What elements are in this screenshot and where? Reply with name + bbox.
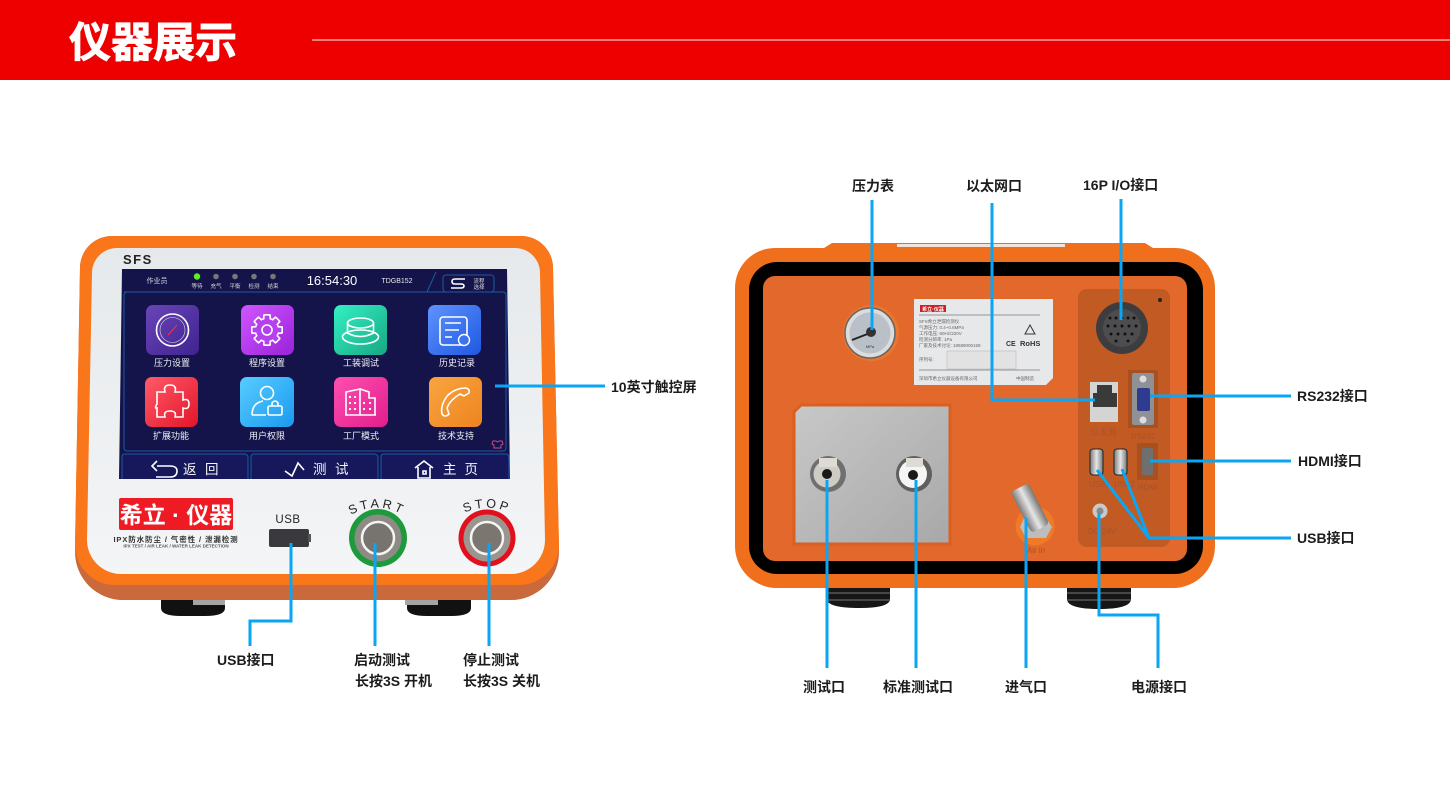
icon: user permissions: 用户权限 <box>249 430 285 441</box>
orange casing <box>75 236 559 600</box>
DC power jack: DC 24V <box>1088 527 1117 536</box>
spec label: 气源压力: 0.4~0.6MPa <box>919 324 964 331</box>
callout: test port: 测试口 <box>803 679 845 695</box>
icon: technical support <box>429 377 482 441</box>
spec label: 序列号: <box>919 356 934 363</box>
start button: START <box>348 499 404 514</box>
callout: power port: 电源接口 <box>1131 679 1187 695</box>
button: back: 返回 <box>183 462 227 477</box>
spec label: 工作电压: 60Hz/220V <box>919 330 962 337</box>
test port <box>810 456 846 492</box>
callout: stop test: 长按3S 关机 <box>463 673 540 689</box>
16P connector <box>1096 298 1162 354</box>
icon: program settings: 程序设置 <box>249 357 285 368</box>
button: home <box>381 454 509 479</box>
RS232 port: RS232 <box>1131 432 1156 441</box>
status bar: 等待 <box>191 282 203 290</box>
callout: 16P IO port: 16P I/O接口 <box>1083 177 1158 193</box>
header banner <box>0 0 1450 80</box>
orange casing <box>735 243 1215 588</box>
stop button <box>458 499 516 566</box>
status bar: 充气 <box>210 282 222 290</box>
status bar: 选择 <box>473 283 485 291</box>
icon: factory mode <box>334 377 388 441</box>
start button <box>348 499 407 567</box>
pressure gauge <box>843 305 899 361</box>
USB port <box>269 514 311 547</box>
status bar: TDGB152 <box>381 278 413 285</box>
callout: stop test: 停止测试 <box>463 652 519 668</box>
air inlet: Air in <box>1027 546 1045 555</box>
spec label: RoHS <box>1020 339 1040 348</box>
icon: pressure settings <box>146 305 199 368</box>
rear plate <box>763 276 1187 561</box>
callout: HDMI port: HDMI接口 <box>1298 453 1362 469</box>
button: home: 主页 <box>443 462 486 477</box>
brand SFS: SFS <box>123 252 153 267</box>
logo: IPX TEST / AIR LEAK / WATER LEAK DETECTION <box>123 544 229 548</box>
icon: factory mode: 工厂模式 <box>343 430 379 441</box>
button: back <box>122 454 248 479</box>
HDMI port <box>1137 443 1158 492</box>
pressure gauge: MPa <box>866 344 875 349</box>
title: 仪器展示 <box>69 19 237 66</box>
logo: 希立 · 仪器 <box>120 502 232 528</box>
touch screen <box>119 269 510 479</box>
black gasket <box>749 262 1203 574</box>
air inlet <box>1011 483 1054 555</box>
callout: pressure gauge: 压力表 <box>852 178 894 194</box>
icon: user permissions <box>240 377 294 441</box>
icon: fixture debugging: 工装调试 <box>343 357 379 368</box>
callout: start test <box>354 543 432 689</box>
icon: history records: 历史记录 <box>439 357 475 368</box>
spec label <box>914 299 1053 385</box>
HDMI port: HDMI <box>1138 483 1158 492</box>
ethernet port: 以太网 <box>1090 427 1118 437</box>
callout: 10 inch touch screen: 10英寸触控屏 <box>611 379 697 395</box>
callout: power port <box>1099 513 1187 695</box>
callout: rear USB ports <box>1097 469 1355 546</box>
USB port: USB <box>275 514 301 526</box>
spec label: 中国制造 <box>1016 375 1034 382</box>
feet <box>827 586 1131 609</box>
panel: front of instrument <box>75 236 559 616</box>
panel: rear of instrument <box>735 243 1215 609</box>
button: test: 测试 <box>313 462 357 477</box>
spec label: 检测分辨率: 1Pa <box>919 336 953 343</box>
icon: program settings <box>241 305 294 368</box>
callout: ethernet port <box>966 178 1095 400</box>
callout: start test: 长按3S 开机 <box>355 673 432 689</box>
icon: small shirt <box>492 441 503 448</box>
silver test panel <box>794 405 950 544</box>
icon: extension functions: 扩展功能 <box>153 430 189 441</box>
logo: IPX防水防尘 / 气密性 / 泄漏检测 <box>113 534 239 544</box>
logo <box>113 498 239 548</box>
connector recess <box>1078 289 1170 547</box>
feet <box>161 597 471 616</box>
callout: ethernet port: 以太网口 <box>966 178 1022 194</box>
USB ports: USB2 <box>1114 480 1135 489</box>
callout: standard test port: 标准测试口 <box>883 679 953 695</box>
standard test port <box>896 456 932 492</box>
USB ports: USB1 <box>1089 480 1110 489</box>
icon: fixture debugging <box>334 305 387 368</box>
menu frame <box>124 292 506 451</box>
status bar <box>124 272 494 292</box>
spec label: 希立·仪器 <box>922 306 944 313</box>
status bar: 流程 <box>473 277 485 285</box>
spec label: CE <box>1006 341 1016 348</box>
button: test <box>251 454 378 479</box>
callout: air inlet: 进气口 <box>1005 679 1047 695</box>
callout: stop test <box>463 543 540 689</box>
status bar: 平衡 <box>229 282 241 290</box>
white face <box>87 248 545 574</box>
icon: technical support: 技术支持 <box>438 430 474 441</box>
icon: history records <box>428 305 481 368</box>
spec label: SFS希立泄漏检测仪 <box>919 318 960 325</box>
USB ports <box>1089 449 1135 489</box>
RS232 port <box>1128 370 1158 441</box>
callout: rear USB ports: USB接口 <box>1297 530 1355 546</box>
spec label: 厂家及技术讨论: 18589000158 <box>919 342 981 349</box>
callout: RS232 port: RS232接口 <box>1297 388 1368 404</box>
status bar: 结束 <box>267 282 279 290</box>
stop button: STOP <box>463 499 508 512</box>
callout: front USB port: USB接口 <box>217 652 275 668</box>
callout: front USB port <box>217 543 291 668</box>
status bar: 作业员 <box>146 276 168 285</box>
icon: pressure settings: 压力设置 <box>154 357 190 368</box>
status bar: 16:54:30 <box>307 273 357 288</box>
callout: start test: 启动测试 <box>354 652 410 668</box>
ethernet port <box>1090 382 1118 437</box>
DC power jack <box>1088 504 1117 536</box>
icon: extension functions <box>145 377 198 441</box>
spec label: 深圳市希立仪器设备有限公司 <box>919 375 978 382</box>
status bar: 检测 <box>248 282 260 290</box>
